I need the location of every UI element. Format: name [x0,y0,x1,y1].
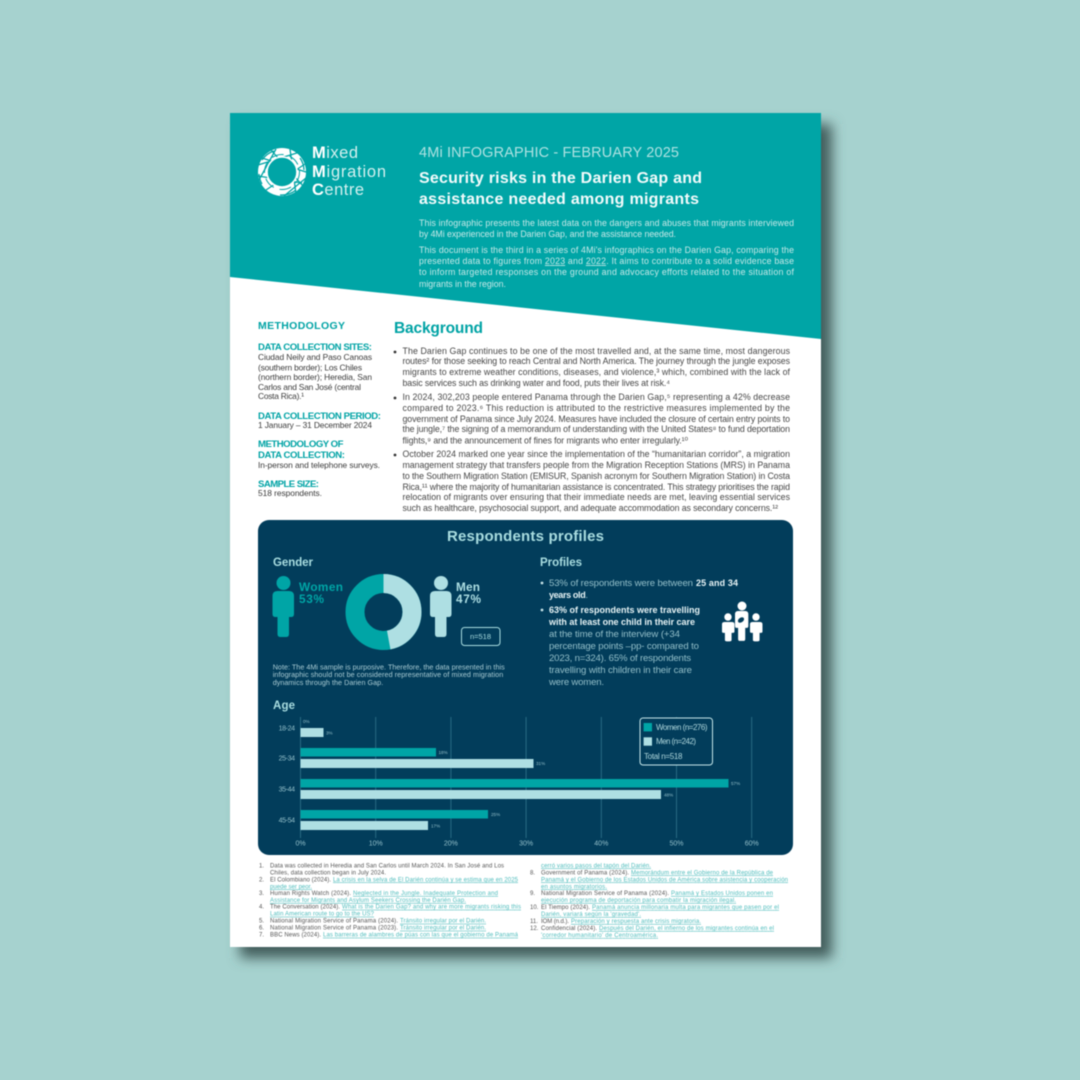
footnotes right column: Government of Panama (2024). [541,870,629,876]
footnotes [259,863,788,939]
footnotes right column: Preparación y respuesta ante crisis migratoria. [571,919,701,925]
bullet 1: The Darien Gap continues to be one of the most travelled and, at the same time, most dangerous [402,346,791,356]
footnotes right column: Panamá y Estados Unidos ponen en [671,891,773,897]
methodology of data collection: DATA COLLECTION: [258,450,345,461]
title: Security risks in the Darien Gap and [419,170,702,187]
profile bullet 1: 25 and 34 [696,578,738,588]
profile bullet 2: were women. [548,677,604,688]
x axis labels: 10% [369,840,383,848]
men share label: 47% [456,592,482,606]
x axis labels: 40% [594,840,608,848]
men share label [456,580,482,606]
footnotes right column: 10. [530,905,539,911]
x axis labels: 30% [519,840,533,848]
footnotes left column: 3. [259,891,264,897]
footnotes left column: puede ser peor. [270,884,312,890]
x axis labels: 0% [295,840,306,848]
bullet 1 [394,346,791,388]
footnotes left column: The Conversation (2024). [270,905,340,911]
header label: 4Mi INFOGRAPHIC - FEBRUARY 2025 [419,145,679,161]
icon: family [722,602,762,641]
methodology of data collection: METHODOLOGY OF [258,439,344,450]
profile bullet 2: at the time of the interview (+34 [549,629,681,640]
women share label: 53% [299,592,324,606]
data collection sites: DATA COLLECTION SITES: [258,342,372,353]
intro text: This infographic presents the latest data on the dangers and abuses that migrants interviewed [419,218,794,228]
footnotes left column: National Migration Service of Panama (2023). [270,926,398,932]
icon: logo globe [258,148,306,196]
x axis labels: 50% [669,840,684,848]
bullet 1: basic services such as drinking water and food, puts their lives at risk.⁴ [402,378,670,388]
bar value labels: 31% [536,761,545,766]
methodology of data collection: In-person and telephone surveys. [258,460,380,470]
bar value labels [303,719,740,828]
bullet 2: In 2024, 302,203 people entered Panama through the Darien Gap,⁵ representing a 42% decrease [402,392,790,402]
bullet 2: the jungle,⁷ the signing of a memorandum of understanding with the United States⁸ to fund deportation [402,424,790,434]
sample size [258,479,322,498]
intro text: presented data to figures from 2023 and 2022. It aims to contribute to a solid evidence base [419,256,794,266]
bar value labels: 17% [431,824,440,828]
footnotes right column: cerró varios pasos del tapón del Darién. [541,863,651,869]
chart legend: Total n=518 [644,752,683,761]
profile bullet 1: years old. [549,590,588,601]
bullet 3: management strategy that transfers people from the Migration Reception Stations (MRS) in Panama [402,460,790,470]
sample size: SAMPLE SIZE: [258,479,319,490]
footnotes left column: 5. [259,919,264,925]
profile bullet 2: percentage points –pp- compared to [549,641,699,652]
bar value labels: 25% [491,812,500,817]
footnotes right column: Confidencial (2024). [541,926,597,932]
gender heading: Gender [273,557,314,569]
sample size box: n=518 [470,632,491,641]
footnotes left column: Data was collected in Heredia and San Carlos until March 2024. In San José and Los [270,863,504,869]
footnotes right column [530,863,788,939]
footnotes left column: El Colombiano (2024). [270,877,331,883]
footnotes right column: Memorándum entre el Gobierno de la República de [631,870,774,876]
age category labels: 18-24 [279,726,295,732]
icon: man [430,576,452,637]
bullet 3: October 2024 marked one year since the implementation of the “humanitarian corridor”, a migration [402,449,790,459]
bullet 3: relocation of migrants over ensuring that their immediate needs are met, leaving essential services [402,492,791,502]
footnotes left column: 4. [259,905,264,911]
bar value labels: 3% [326,730,333,736]
methodology heading: METHODOLOGY [258,320,345,332]
profile bullet 2: 2023, n=324). 65% of respondents [549,653,691,664]
footnotes right column: 8. [530,870,535,876]
footnotes right column: National Migration Service of Panama (2024). [541,891,669,897]
sample size: 518 respondents. [258,488,322,498]
data collection sites: (southern border); Los Chiles [258,362,362,372]
sample note [273,662,505,687]
profile bullet 2: 63% of respondents were travelling [549,605,700,615]
intro text: This document is the third in a series of 4Mi's infographics on the Darien Gap, comparing the [419,245,794,255]
footnotes left column: Neglected in the Jungle. Inadequate Protection and [353,891,498,897]
bullet 2: compared to 2023.⁶ This reduction is attributed to the restrictive measures implemented by the [402,403,790,413]
sample note: Note: The 4Mi sample is purposive. Therefore, the data presented in this [273,662,505,672]
footnotes right column: Darién, variará según la 'gravedad'. [541,912,641,918]
profile bullet 1: 53% of respondents were between [549,578,693,589]
bar value labels: 48% [664,792,673,798]
infographic page [230,113,821,947]
footnotes left column: 6. [259,926,264,932]
intro text: migrants in the region. [419,279,506,289]
footnotes left column: La crisis en la selva de El Darién continúa y se estima que en 2025 [333,877,519,883]
age category labels: 45-54 [279,818,295,824]
profiles heading: Profiles [540,557,582,569]
chart legend [640,718,712,765]
footnotes left column: 1. [259,863,264,869]
panel: background [394,320,791,513]
footnotes left column: What is the Darien Gap? and why are more migrants risking this [342,905,521,911]
icon: woman [272,576,294,637]
footnotes left column: 2. [259,877,264,883]
women share label: Women [299,580,343,594]
panel: respondents profiles [258,520,793,855]
profile bullet 2 [541,605,700,688]
sample note: infographic should not be considered representative of mixed migration [273,670,503,679]
footnotes left column: Chiles, data collection began in July 2024. [270,870,386,876]
bar value labels: 57% [731,781,740,786]
data collection period [258,411,381,430]
footnotes left column [259,863,521,939]
footnotes right column: Después del Darién, el infierno de los migrantes continúa en el [599,926,774,932]
data collection sites: Carlos and San José (central [258,382,361,392]
data collection sites: Costa Rica).¹ [258,391,304,401]
intro text: to inform targeted responses on the ground and advocacy efforts related to the situation of [419,267,795,277]
data collection sites: Ciudad Neily and Paso Canoas [258,352,372,362]
x axis labels [295,840,759,848]
footnotes left column: Tránsito irregular por el Darién. [400,926,486,932]
logo wordmark: Migration [312,163,386,181]
bullet 1: migrants to extreme weather conditions, diseases, and violence,³ which, combined with the lack of [402,367,791,377]
methodology of data collection [258,439,380,470]
footnotes right column: Panamá anuncia millonaria multa para migrantes que pasen por el [592,905,779,911]
intro text: by 4Mi experienced in the Darien Gap, and the assistance needed. [419,229,676,239]
data collection period: DATA COLLECTION PERIOD: [258,411,381,422]
panel heading: Respondents profiles [447,528,604,545]
footnotes right column: 12. [530,926,539,932]
women bars [300,748,728,818]
footnotes left column: Assistance for Migrants and Asylum Seekers Crossing the Darién Gap. [270,898,466,904]
footnotes left column: Las barreras de alambres de púas con las que el gobierno de Panamá [323,933,519,939]
bar chart: age [279,717,759,848]
logo wordmark: Mixed [312,144,358,162]
age heading: Age [273,700,295,712]
logo: Mixed Migration Centre [258,144,386,199]
title: assistance needed among migrants [419,191,699,208]
footnotes left column: 7. [259,933,264,939]
footnotes right column: 'corredor humanitario' de Centroamérica. [541,933,658,939]
bullet 2: government of Panama since July 2024. Measures have included the closure of certain entry points to [402,414,790,424]
data collection sites [258,342,372,401]
age category labels [279,726,295,824]
panel: methodology [258,320,381,498]
footnotes right column: Panamá y el Gobierno de los Estados Unidos de América sobre asistencia y cooperación [541,877,788,883]
donut chart: gender [355,584,412,640]
sample size box [462,628,500,646]
footnotes left column: National Migration Service of Panama (2024). [270,919,398,925]
footnotes left column: Latin American route to go to the US? [270,912,375,918]
profile bullet 1 [541,578,738,601]
bullet 3: to the Southern Migration Station (EMISUR, Spanish acronym for Southern Migration Station) in Costa [402,471,790,481]
footnotes right column: El Tiempo (2024). [541,905,590,911]
footnotes left column: Human Rights Watch (2024). [270,891,351,897]
profile bullet 2: with at least one child in their care [548,617,695,627]
x axis labels: 20% [444,840,458,848]
chart legend: Men (n=242) [656,737,696,746]
age category labels: 35-44 [279,786,295,794]
logo wordmark [312,144,386,199]
footnotes right column: 9. [530,891,535,897]
bar value labels: 18% [438,750,448,755]
footnotes right column: ejecución programa de deportación para combatir la migración ilegal. [541,898,736,904]
footnotes right column: IOM (n.d.). [541,919,569,925]
logo wordmark: Centre [312,181,364,199]
bullet 2: flights,⁹ and the announcement of fines for migrants who enter irregularly.¹⁰ [402,436,688,446]
bar value labels: 0% [303,719,310,724]
chart legend: Women (n=276) [656,723,708,732]
background heading: Background [394,320,483,337]
data collection sites: (northern border); Heredia, San [258,372,372,382]
bullet 3: such as healthcare, psychosocial support, and adequate accommodation as secondary concerns.¹² [402,503,778,513]
age category labels: 25-34 [279,756,295,762]
data collection period: 1 January – 31 December 2024 [258,420,372,430]
footnotes right column: 11. [530,919,538,925]
profile bullet 2: travelling with children in their care [549,665,692,676]
bullet 1: routes² for those seeking to reach Central and North America. The journey through the jungle exposes [402,356,791,366]
intro text [419,218,795,289]
bullet 3 [394,449,791,513]
title [419,170,702,208]
sample note: dynamics through the Darien Gap. [273,678,383,687]
women share label [299,580,343,606]
bullet 2 [394,392,790,446]
footnotes right column: en asuntos migratorios. [541,884,607,890]
footnotes left column: Tránsito irregular por el Darién. [400,919,486,925]
x axis labels: 60% [745,840,759,848]
men bars [300,728,661,830]
men share label: Men [456,580,480,594]
footnotes left column: BBC News (2024). [270,933,321,939]
header banner [230,113,821,339]
bullet 3: Rica,¹¹ where the majority of humanitarian assistance is concentrated. This strategy prioritises the rapid [402,482,790,492]
